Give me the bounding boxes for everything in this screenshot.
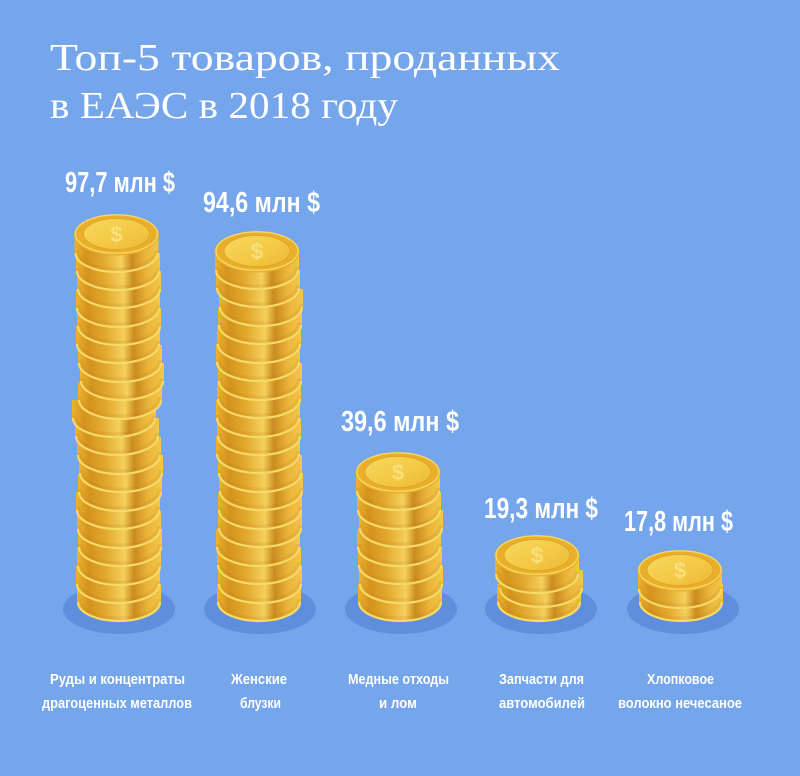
label: car parts: автомобилей <box>499 695 585 712</box>
coin stack: cotton fibre: $ <box>674 558 686 583</box>
label: copper <box>348 671 449 712</box>
value: 39,6: 39,6 млн $ <box>341 406 459 438</box>
label: copper: Медные отходы <box>348 671 449 688</box>
label: blouses: блузки <box>240 695 281 712</box>
coin stack: women's blouses: $ <box>251 239 263 264</box>
label: blouses <box>230 671 287 712</box>
label: ores: Руды и концентраты <box>50 671 185 688</box>
coin stack: copper scrap: $ <box>392 460 404 485</box>
value: 17,8: 17,8 млн $ <box>624 506 733 538</box>
title: в ЕАЭС в 2018 году <box>50 85 398 127</box>
coin stack: ores and precious metal concentrates: $ <box>110 222 123 247</box>
value: 19,3: 19,3 млн $ <box>484 493 598 525</box>
coin stack: car parts: $ <box>531 543 543 568</box>
title <box>50 37 560 127</box>
label: ores: драгоценных металлов <box>42 695 192 712</box>
label: copper: и лом <box>379 695 417 712</box>
value: 97,7: 97,7 млн $ <box>65 167 175 199</box>
coin stack: car parts <box>485 536 597 634</box>
label: blouses: Женские <box>230 671 287 688</box>
label: ores <box>42 671 192 712</box>
coin stack: women's blouses <box>204 232 316 634</box>
title: Топ-5 товаров, проданных <box>50 37 560 79</box>
coin stack: copper scrap <box>345 452 457 634</box>
label: car parts: Запчасти для <box>499 671 584 688</box>
label: car parts <box>499 671 585 712</box>
label: cotton: волокно нечесаное <box>618 695 742 712</box>
coin stack: cotton fibre <box>627 550 739 634</box>
label: cotton: Хлопковое <box>647 671 714 688</box>
label: cotton <box>618 671 742 712</box>
coin stack: ores and precious metal concentrates <box>63 214 175 634</box>
value: 94,6: 94,6 млн $ <box>203 187 320 219</box>
